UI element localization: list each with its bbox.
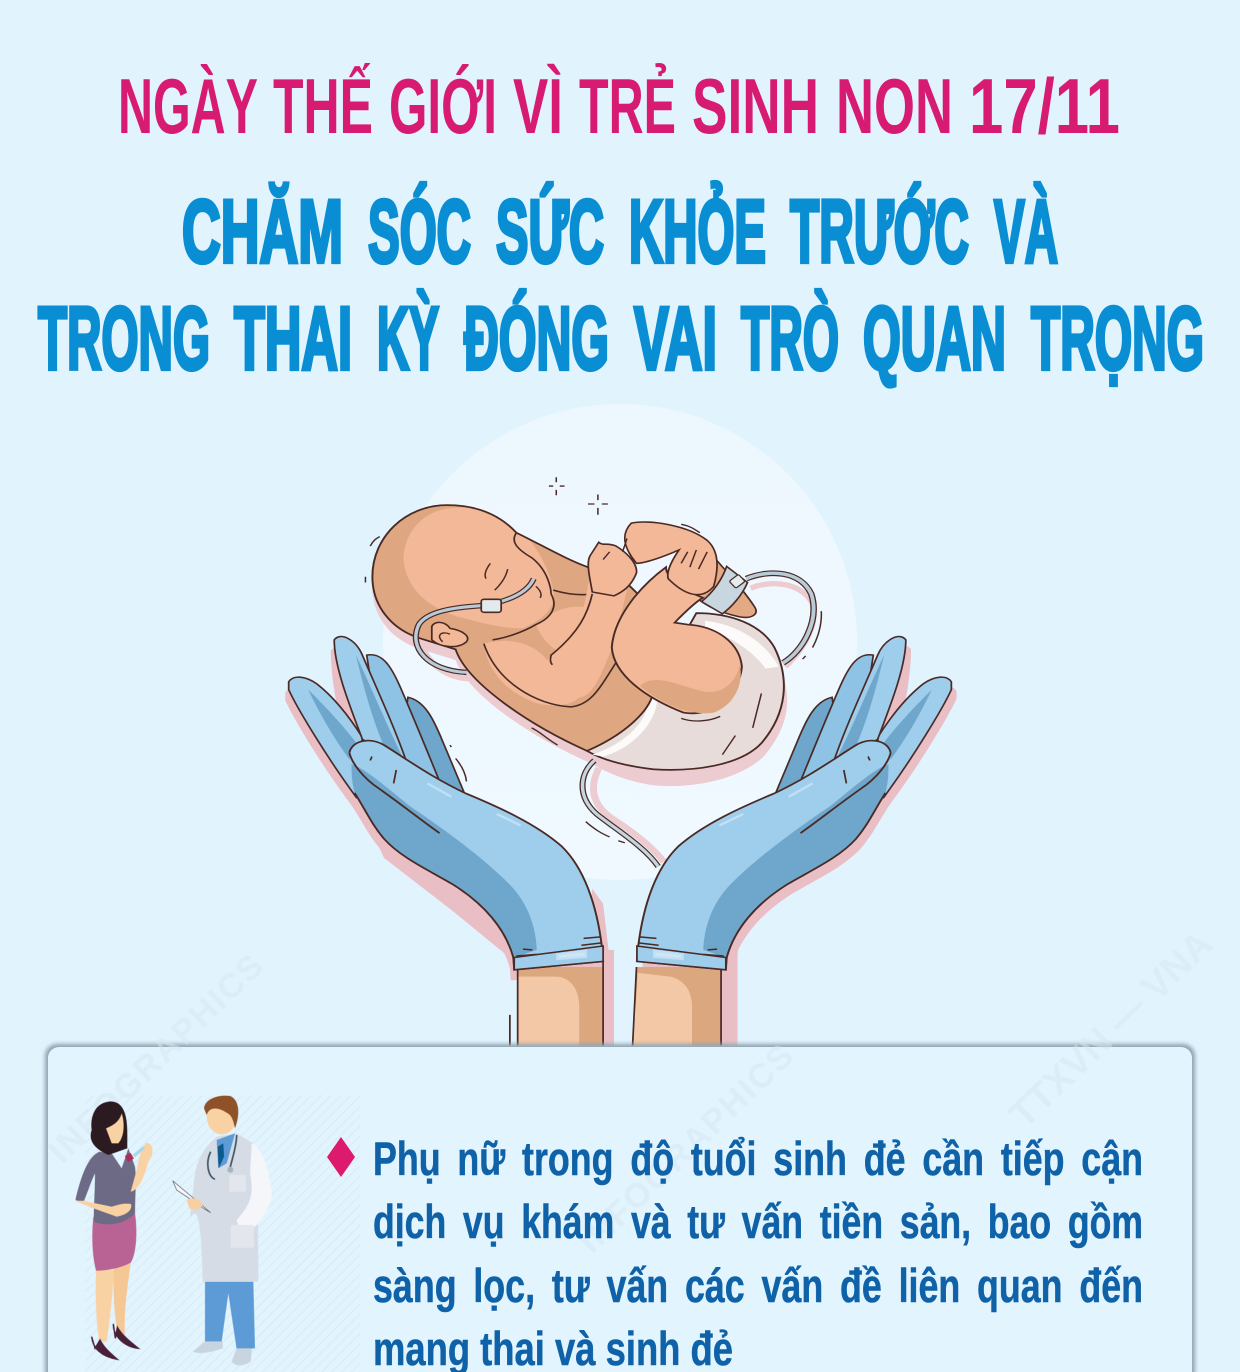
heading: line 2: QUAN (863, 288, 1006, 388)
heading: line 2: THAI (234, 288, 352, 388)
watermarks: INFOGRAPHICS (571, 1036, 802, 1261)
icon: right gloved hand (637, 637, 951, 970)
illustration: pregnant woman and doctor (75, 1096, 272, 1365)
heading: line 1 (182, 181, 1058, 281)
heading: line 1: VÀ (994, 181, 1058, 281)
watermarks: INFOGRAPHICS (41, 946, 272, 1171)
icon: sparkles (365, 477, 821, 843)
title: date line: NGÀY (118, 62, 258, 150)
icon: right hand shadow (642, 646, 957, 1046)
icon: diaper (587, 613, 784, 770)
title: date line (118, 62, 1120, 150)
heading: line 1: CHĂM (182, 181, 343, 281)
heading: line 2: ĐÓNG (464, 288, 609, 388)
heading: line 2 (38, 288, 1204, 388)
icon: baby head and torso (372, 505, 657, 751)
icon: leg and foot (612, 552, 756, 713)
title: date line: GIỚI (389, 62, 497, 150)
heading: line 1: SỨC (496, 181, 604, 281)
title: date line: THẾ (273, 62, 373, 150)
icon: doctor (173, 1096, 272, 1365)
title: date line: SINH (692, 62, 819, 150)
icon: left gloved hand (289, 637, 603, 970)
watermarks: TTXVN — VNA (1002, 923, 1221, 1136)
heading: line 2: TRONG (38, 288, 210, 388)
heading: line 1: KHỎE (629, 181, 766, 281)
heading: line 2: TRÒ (741, 288, 839, 388)
icon: baby shadow and tubes (372, 516, 814, 866)
heading: line 1: SÓC (368, 181, 471, 281)
icon: left forearm (510, 961, 603, 1046)
heading: line 1: TRƯỚC (790, 181, 969, 281)
striped backdrop behind people (85, 1095, 360, 1372)
icon: right forearm (633, 967, 721, 1046)
title: date line: TRẺ (579, 62, 676, 150)
icon: left hand shadow (285, 647, 614, 1046)
panel: advice card (45, 1044, 1195, 1372)
title: date line: 17/11 (969, 62, 1120, 150)
bullet marker (327, 1137, 355, 1177)
pale circle behind baby (383, 404, 857, 880)
title: date line: NON (836, 62, 953, 150)
watermarks (41, 923, 1221, 1261)
title: date line: VÌ (513, 62, 563, 150)
text block: advice (373, 1132, 1143, 1372)
icon: woman (75, 1101, 153, 1359)
illustration: baby in gloved hands (285, 477, 957, 1046)
icon: baby hands (588, 522, 717, 596)
heading: line 2: VAI (634, 288, 717, 388)
icon: foot bracelet sensor (702, 566, 748, 614)
heading: line 2: KỲ (377, 288, 439, 388)
icon: nasal oxygen tube (416, 579, 534, 672)
